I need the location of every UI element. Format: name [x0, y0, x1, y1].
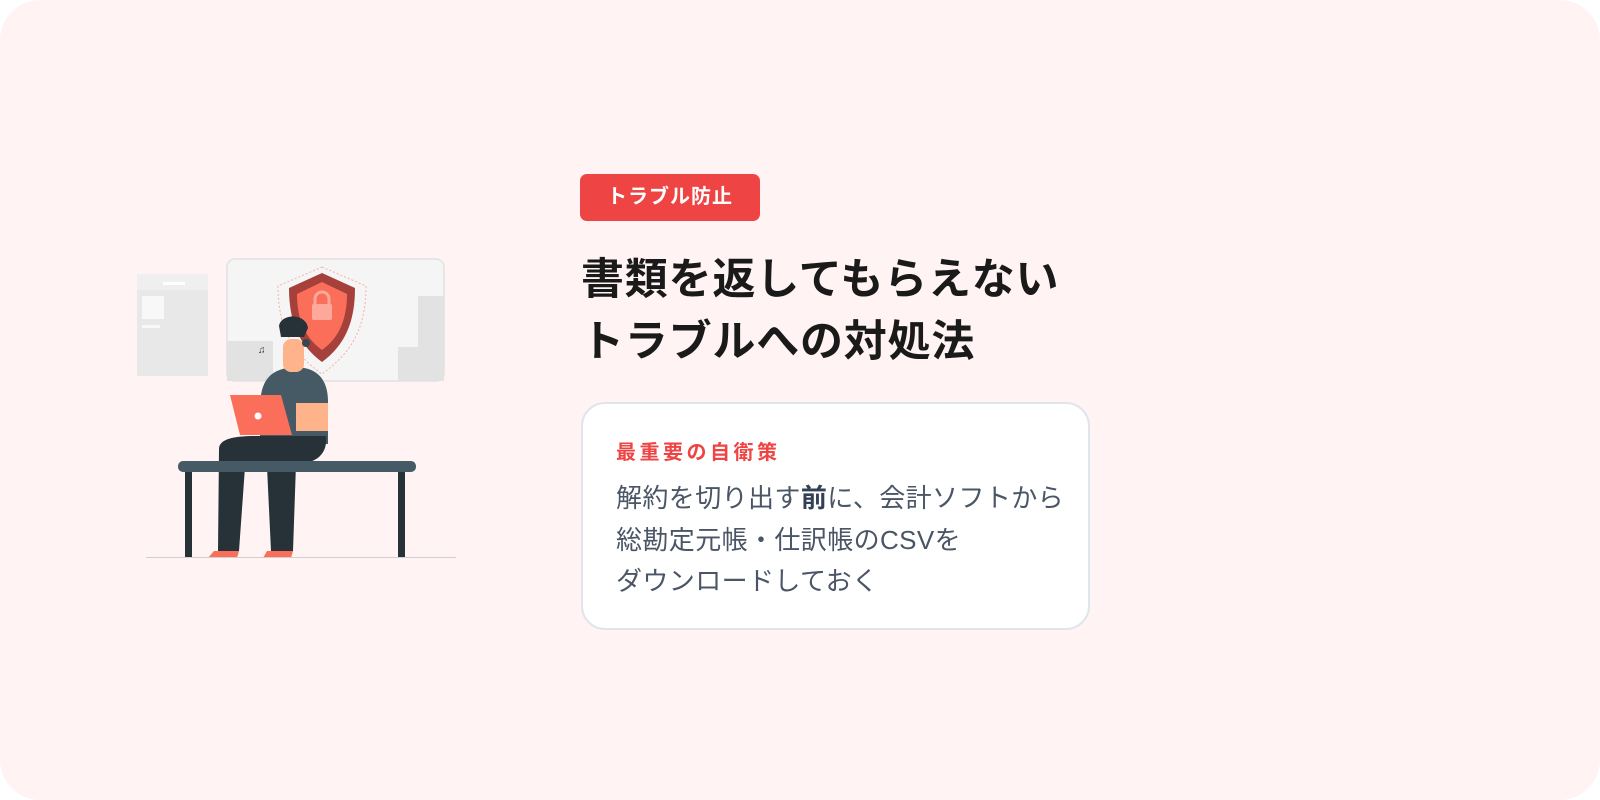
title: トラブルへの対処法 [581, 318, 975, 366]
icon: shield [278, 267, 366, 374]
badge: トラブル防止 [607, 186, 733, 208]
card text [616, 483, 1064, 596]
window panel [227, 259, 444, 381]
illustration: person with laptop and shield [137, 258, 456, 558]
card text: 解約を切り出す前に、会計ソフトから [616, 483, 1064, 513]
badge [580, 174, 760, 221]
card label: 最重要の自衛策 [616, 442, 780, 464]
card text: 総勘定元帳・仕訳帳のCSVを [616, 524, 961, 554]
person: ♫ [258, 345, 266, 356]
card: key self-defense [581, 402, 1090, 630]
left panel [137, 274, 208, 376]
title: 書類を返してもらえない [581, 256, 1059, 304]
bench [146, 461, 456, 558]
person [208, 316, 328, 558]
title [581, 256, 1059, 366]
card text: ダウンロードしておく [616, 566, 878, 596]
